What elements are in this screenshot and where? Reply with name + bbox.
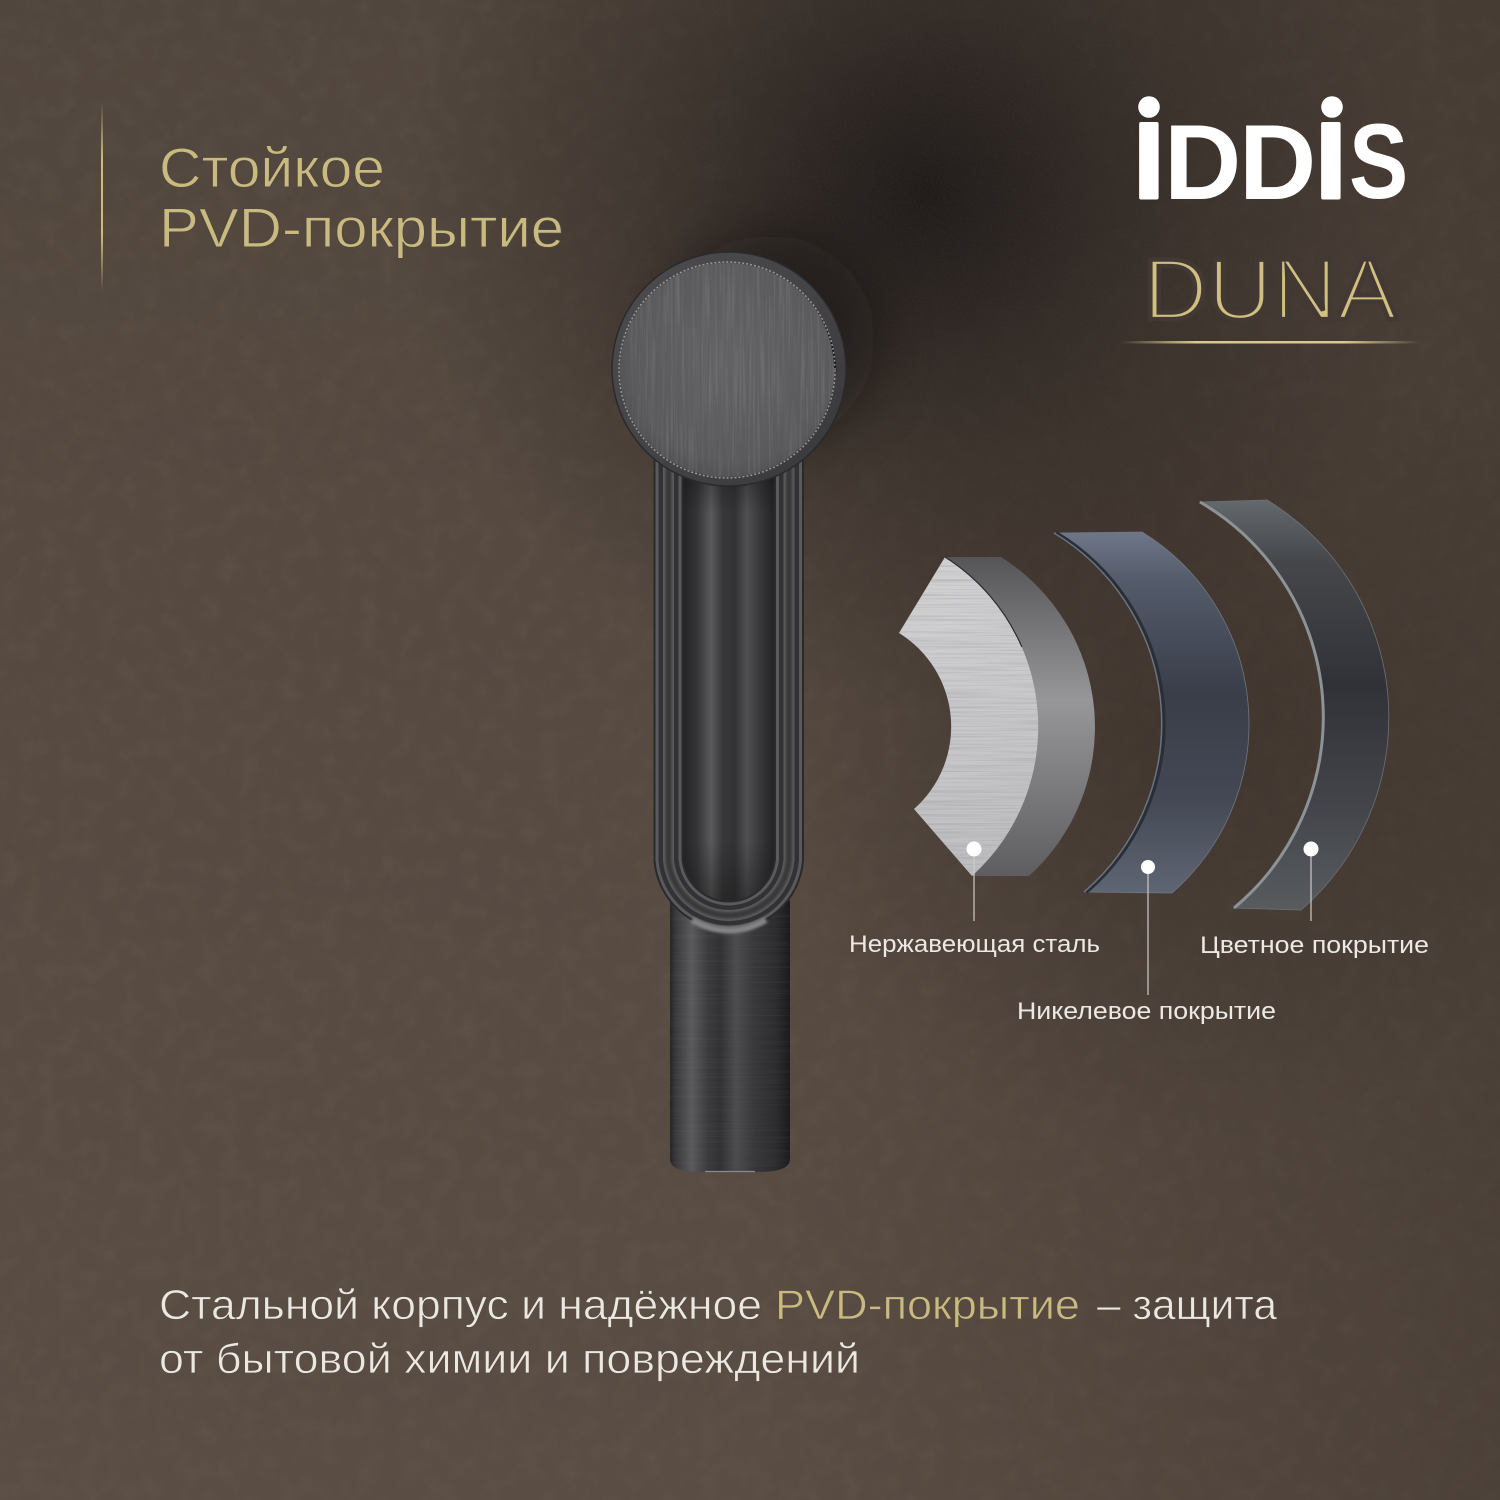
callout: nickel coating: Никелевое покрытие bbox=[1017, 998, 1276, 1025]
callout: nickel coating bbox=[1017, 860, 1276, 1025]
brushed disc bbox=[615, 258, 839, 482]
callout: stainless steel: Нержавеющая сталь bbox=[849, 931, 1100, 958]
logo: IDDIS: D bbox=[1239, 102, 1316, 222]
bottom description text: от бытовой химии и повреждений bbox=[159, 1335, 860, 1382]
bottom description text: – защита bbox=[1097, 1281, 1278, 1328]
logo: IDDIS bbox=[1134, 96, 1408, 222]
logo: IDDIS: D bbox=[1164, 102, 1241, 222]
vertical gold rule bbox=[101, 102, 103, 292]
inner stem in slot bbox=[683, 450, 777, 907]
gold underline bbox=[1120, 341, 1420, 344]
heading bbox=[159, 136, 564, 259]
product: hygienic shower head bbox=[612, 235, 875, 1172]
bottom description text: PVD-покрытие bbox=[775, 1281, 1080, 1328]
callout: colour coating: Цветное покрытие bbox=[1200, 932, 1429, 959]
wall plate ring bbox=[612, 252, 846, 486]
product shadow bbox=[665, 235, 875, 445]
heading: PVD-покрытие bbox=[159, 196, 564, 259]
logo: IDDIS: S bbox=[1349, 101, 1408, 221]
U-shaped loop body bbox=[668, 450, 789, 930]
lower tube bbox=[670, 900, 790, 1172]
layer: stainless steel bbox=[895, 555, 1095, 880]
series name: DUNA: DUNA bbox=[1143, 242, 1398, 338]
layer: colour coating bbox=[1200, 500, 1389, 910]
heading: Стойкое bbox=[159, 136, 385, 199]
logo: IDDIS: I bbox=[1134, 100, 1164, 220]
callout: stainless steel bbox=[849, 842, 1100, 958]
bottom description text: Стальной корпус и надёжное bbox=[159, 1281, 762, 1328]
logo: IDDIS: I bbox=[1316, 100, 1346, 220]
layer: nickel coating bbox=[1054, 532, 1249, 893]
bottom description text bbox=[159, 1281, 1278, 1382]
callout: colour coating bbox=[1200, 842, 1429, 959]
